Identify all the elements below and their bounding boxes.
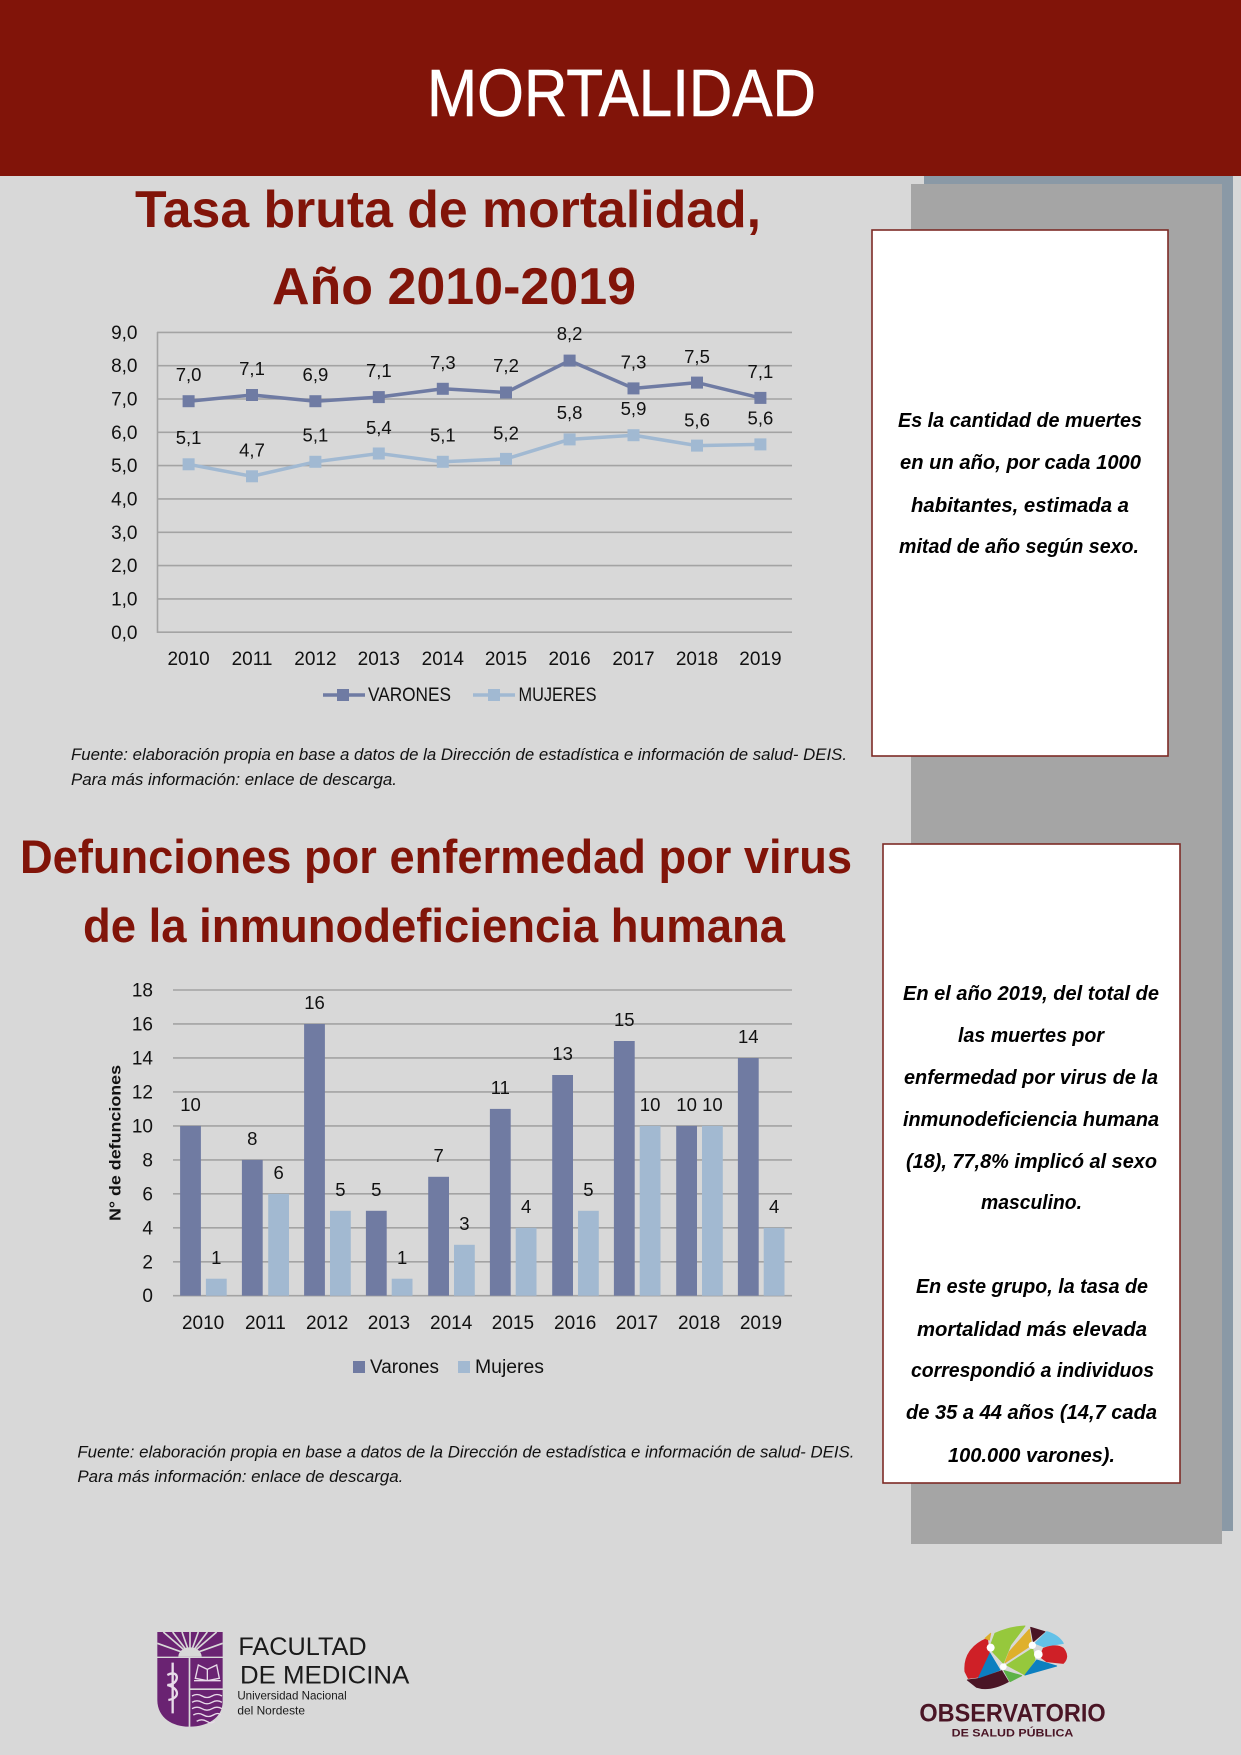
- data labels: varones: 7,2: [493, 355, 519, 376]
- y axis labels: 5,0: [111, 456, 138, 477]
- source note 1: [71, 746, 847, 789]
- x axis labels: 2017: [616, 1313, 658, 1334]
- data labels: varones: 8,2: [557, 323, 582, 344]
- y axis labels: 10: [132, 1116, 153, 1137]
- side panel: front gray layer: [911, 184, 1222, 1544]
- source note 2: [77, 1444, 854, 1486]
- data labels: varones: 6,9: [303, 364, 328, 385]
- callout: definition: mitad de año según sexo.: [899, 536, 1139, 558]
- x axis labels: 2019: [739, 649, 782, 670]
- data labels: mujeres: 4: [769, 1196, 779, 1217]
- x axis labels: 2017: [612, 649, 655, 670]
- y axis labels: 6,0: [111, 423, 138, 444]
- side panel: back blue-gray layer: [924, 170, 1233, 1531]
- logo text: OBSERVATORIO: [919, 1701, 1106, 1728]
- data labels: varones: 7,3: [430, 352, 456, 373]
- data labels: varones: 11: [491, 1077, 510, 1098]
- legend: [353, 1357, 544, 1378]
- callout: hiv findings: inmunodeficiencia humana: [903, 1109, 1159, 1131]
- callout: hiv findings: las muertes por: [958, 1025, 1105, 1047]
- bar chart: defunciones: [108, 980, 792, 1378]
- logo text: FACULTAD: [238, 1633, 367, 1661]
- data labels: varones: 7,5: [684, 346, 710, 367]
- data labels: varones: 16: [304, 992, 325, 1013]
- data labels: varones: [176, 323, 773, 385]
- callout: definition: Es la cantidad de muertes: [898, 410, 1142, 432]
- data labels: mujeres: 5,6: [748, 407, 773, 428]
- data labels: varones: 7: [433, 1145, 444, 1166]
- logo text: Universidad Nacional: [237, 1689, 347, 1702]
- logo: facultad de medicina: [157, 1632, 409, 1727]
- legend: VARONES: [368, 685, 451, 706]
- y axis labels: 14: [132, 1048, 153, 1069]
- source note 1: Fuente: elaboración propia en base a datos de la Dirección de estadística e información de salud- DEIS.: [71, 746, 847, 764]
- y axis labels: 9,0: [111, 323, 138, 344]
- y axis labels: 7,0: [111, 390, 138, 410]
- x axis labels: 2011: [232, 649, 272, 670]
- y axis labels: [111, 323, 138, 644]
- data labels: mujeres: 5,6: [684, 409, 710, 430]
- callout: hiv findings: correspondió a individuos: [911, 1360, 1154, 1382]
- x axis labels: 2014: [430, 1313, 473, 1334]
- x axis labels: 2015: [492, 1313, 534, 1334]
- x axis labels: [167, 649, 782, 670]
- callout: definition: [872, 230, 1168, 756]
- heading: tasa bruta: Tasa bruta de mortalidad,: [135, 181, 761, 239]
- legend: [323, 685, 596, 706]
- data labels: mujeres: 5,4: [366, 417, 392, 438]
- data labels: mujeres: 5,1: [430, 425, 456, 446]
- series: mujeres: [183, 429, 766, 482]
- x axis labels: [182, 1313, 782, 1334]
- data labels: varones: 7,0: [176, 364, 201, 385]
- x axis labels: 2013: [368, 1313, 410, 1334]
- heading: defunciones: Defunciones por enfermedad por virus: [20, 830, 852, 883]
- data labels: varones: 8: [247, 1128, 257, 1149]
- y axis labels: 3,0: [111, 523, 138, 544]
- y axis labels: 2: [142, 1252, 153, 1273]
- data labels: mujeres: [176, 398, 773, 460]
- data labels: mujeres: 10: [702, 1094, 723, 1115]
- logo text: [919, 1701, 1106, 1740]
- data labels: mujeres: 1: [211, 1247, 221, 1268]
- heading: defunciones: de la inmunodeficiencia humana: [83, 899, 786, 952]
- data labels: mujeres: 1: [397, 1247, 407, 1268]
- source note 1: Para más información: enlace de descarga.: [71, 771, 397, 789]
- header band: [0, 0, 1241, 176]
- x axis labels: 2019: [740, 1313, 782, 1334]
- y axis labels: 4,0: [111, 490, 138, 510]
- legend: MUJERES: [518, 685, 596, 706]
- y axis labels: [132, 980, 153, 1307]
- logo text: del Nordeste: [237, 1704, 305, 1717]
- x axis labels: 2010: [182, 1313, 224, 1334]
- callout: hiv findings: [883, 844, 1180, 1483]
- callout: definition: habitantes, estimada a: [911, 495, 1129, 517]
- data labels: mujeres: 4: [521, 1196, 531, 1217]
- data labels: mujeres: 5,9: [621, 398, 646, 419]
- callout: hiv findings: 100.000 varones).: [948, 1445, 1115, 1467]
- x axis labels: 2016: [548, 649, 591, 670]
- y axis title: N° de defunciones: [108, 1065, 124, 1221]
- x axis labels: 2012: [306, 1313, 348, 1334]
- data labels: mujeres: 5: [583, 1179, 594, 1200]
- legend: Mujeres: [475, 1357, 544, 1378]
- series: varones: [183, 355, 766, 407]
- data labels: varones: 7,3: [621, 351, 646, 372]
- data labels: mujeres: 5,1: [176, 427, 201, 448]
- data labels: mujeres: 5,2: [493, 422, 519, 443]
- y axis labels: 2,0: [111, 556, 138, 577]
- data labels: varones: 7,1: [366, 360, 392, 381]
- callout: hiv findings: enfermedad por virus de la: [904, 1067, 1158, 1089]
- x axis labels: 2016: [554, 1313, 596, 1334]
- y axis labels: 8: [142, 1150, 153, 1171]
- line chart: tasa bruta de mortalidad: [111, 323, 792, 706]
- x axis labels: 2014: [422, 649, 464, 670]
- data labels: mujeres: 5,1: [303, 425, 328, 446]
- y axis labels: 4: [142, 1218, 153, 1239]
- data labels: varones: 7,1: [239, 358, 265, 379]
- data labels: varones: 7,1: [748, 361, 773, 382]
- data labels: mujeres: 6: [273, 1162, 284, 1183]
- title: MORTALIDAD: [427, 56, 816, 131]
- data labels: mujeres: 3: [459, 1213, 470, 1234]
- data labels: mujeres: 10: [640, 1094, 660, 1115]
- bars: varones: [180, 1024, 759, 1296]
- icon: brain: [965, 1626, 1067, 1689]
- callout: definition: en un año, por cada 1000: [900, 452, 1141, 474]
- logo text: [237, 1633, 409, 1717]
- callout: hiv findings: de 35 a 44 años (14,7 cada: [906, 1402, 1157, 1424]
- data labels: varones: 10: [180, 1094, 201, 1115]
- data labels: mujeres: 5: [335, 1179, 346, 1200]
- data labels: varones: 14: [738, 1026, 759, 1047]
- heading: tasa bruta: [135, 181, 761, 316]
- heading: defunciones: [20, 830, 852, 952]
- source note 2: Fuente: elaboración propia en base a datos de la Dirección de estadística e información de salud- DEIS.: [77, 1444, 854, 1462]
- callout: hiv findings: masculino.: [981, 1192, 1082, 1214]
- callout: hiv findings: En el año 2019, del total de: [903, 983, 1159, 1005]
- y axis labels: 0,0: [111, 623, 138, 644]
- x axis labels: 2018: [676, 649, 718, 670]
- data labels: mujeres: [211, 1094, 779, 1268]
- callout: hiv findings: (18), 77,8% implicó al sexo: [906, 1151, 1157, 1173]
- callout: hiv findings: mortalidad más elevada: [917, 1319, 1147, 1341]
- icon: shield: [157, 1632, 223, 1727]
- y axis labels: 12: [132, 1082, 153, 1103]
- x axis labels: 2011: [245, 1313, 286, 1334]
- x axis labels: 2012: [294, 649, 337, 670]
- x axis labels: 2013: [358, 649, 400, 670]
- logo: observatorio de salud publica: [919, 1626, 1106, 1740]
- data labels: varones: [180, 992, 759, 1200]
- logo text: DE MEDICINA: [240, 1661, 409, 1689]
- callout: hiv findings: En este grupo, la tasa de: [916, 1276, 1148, 1298]
- y axis labels: 0: [142, 1286, 153, 1307]
- data labels: varones: 5: [371, 1179, 381, 1200]
- y axis labels: 8,0: [111, 356, 138, 377]
- legend: Varones: [370, 1357, 439, 1378]
- data labels: varones: 13: [552, 1043, 573, 1064]
- y axis labels: 16: [132, 1014, 153, 1035]
- y axis labels: 6: [142, 1184, 153, 1205]
- data labels: mujeres: 4,7: [239, 439, 265, 460]
- x axis labels: 2018: [678, 1313, 720, 1334]
- data labels: varones: 15: [614, 1009, 635, 1030]
- heading: tasa bruta: Año 2010-2019: [272, 258, 636, 316]
- logo text: DE SALUD PÚBLICA: [952, 1727, 1073, 1740]
- data labels: mujeres: 5,8: [557, 402, 582, 423]
- y axis labels: 18: [132, 980, 153, 1002]
- y axis labels: 1,0: [111, 590, 138, 610]
- x axis labels: 2015: [485, 649, 527, 670]
- data labels: varones: 10: [676, 1094, 697, 1115]
- bars: mujeres: [206, 1126, 784, 1296]
- source note 2: Para más información: enlace de descarga.: [77, 1468, 403, 1486]
- x axis labels: 2010: [167, 649, 210, 670]
